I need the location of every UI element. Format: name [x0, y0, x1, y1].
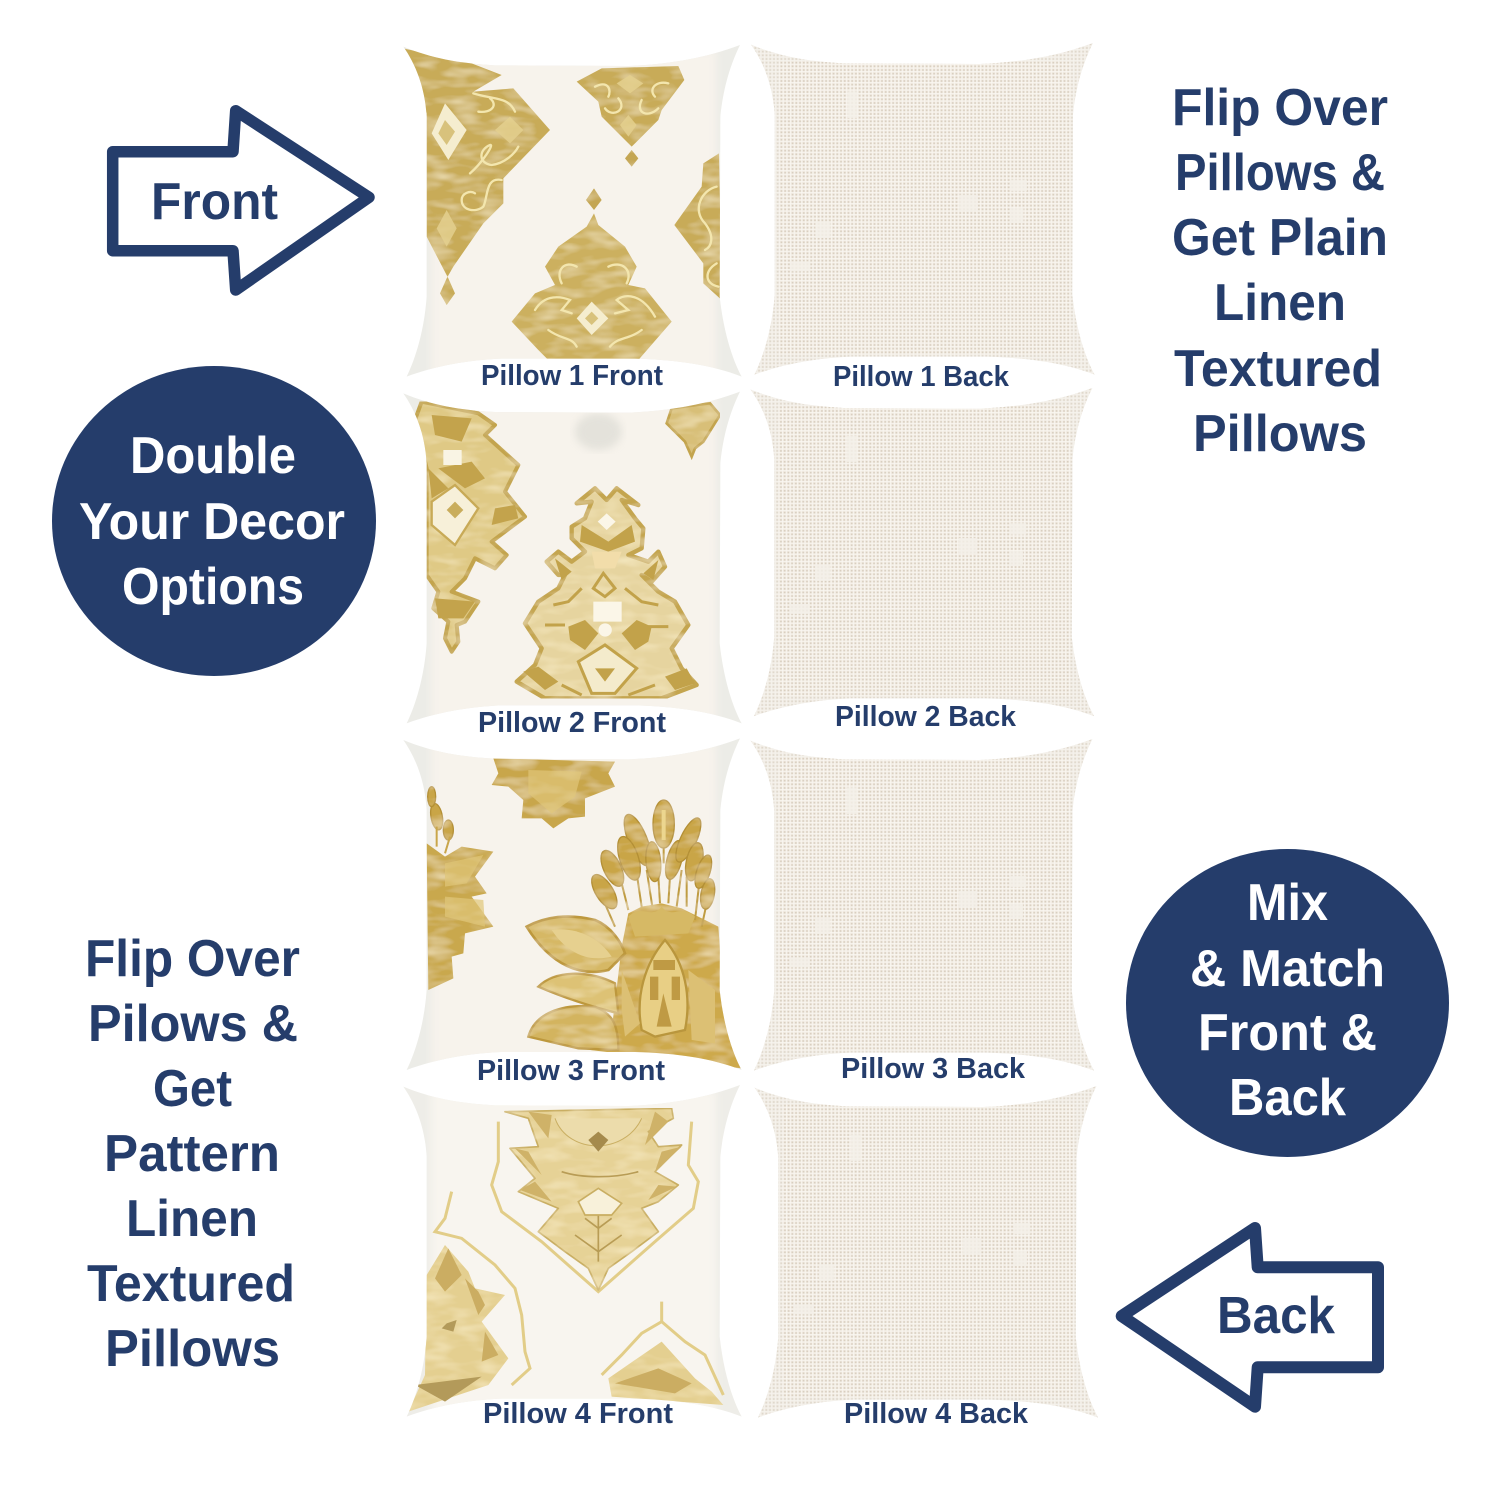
badge: mix and match	[1126, 849, 1449, 1157]
label: pillow 2 back: Pillow 2 Back	[835, 701, 1017, 733]
badge: double your decor options: Your Decor	[79, 493, 345, 551]
badge: double your decor options: Options	[122, 558, 304, 616]
pillow 1 back	[751, 43, 1095, 375]
text block: flip over to pattern linen: Pattern	[104, 1125, 280, 1183]
label: pillow 4 front: Pillow 4 Front	[483, 1398, 673, 1430]
text block: flip over to plain linen: Textured	[1174, 340, 1382, 398]
badge: mix and match: Front &	[1198, 1004, 1377, 1062]
label: pillow 1 front: Pillow 1 Front	[481, 360, 663, 392]
text block: flip over to plain linen: Pillows &	[1175, 144, 1385, 202]
pillow 3 front	[403, 738, 742, 1070]
pillow 1 front	[403, 45, 742, 377]
text block: flip over to plain linen	[1172, 79, 1388, 463]
arrow: front: Front	[151, 173, 278, 231]
text block: flip over to plain linen: Pillows	[1193, 405, 1367, 463]
badge: double your decor options: Double	[130, 427, 296, 485]
text block: flip over to plain linen: Flip Over	[1172, 79, 1388, 137]
arrow: front	[113, 111, 369, 290]
label: pillow 3 back: Pillow 3 Back	[841, 1053, 1026, 1085]
badge: mix and match: & Match	[1190, 940, 1385, 998]
label: pillow 3 front: Pillow 3 Front	[477, 1055, 665, 1087]
pillow 4 back	[754, 1086, 1098, 1418]
text block: flip over to pattern linen: Textured	[87, 1255, 295, 1313]
arrow: back	[1122, 1228, 1378, 1407]
badge: mix and match: Back	[1229, 1069, 1346, 1127]
label: pillow 1 back: Pillow 1 Back	[833, 361, 1010, 393]
badge: mix and match: Mix	[1247, 874, 1328, 932]
label: pillow 2 front: Pillow 2 Front	[478, 707, 666, 739]
text block: flip over to pattern linen	[85, 930, 300, 1378]
arrow: back: Back	[1217, 1287, 1335, 1345]
label: pillow 4 back: Pillow 4 Back	[844, 1398, 1029, 1430]
text block: flip over to pattern linen: Flip Over	[85, 930, 300, 988]
text block: flip over to pattern linen: Get	[153, 1060, 232, 1118]
text block: flip over to plain linen: Get Plain	[1172, 209, 1388, 267]
text block: flip over to pattern linen: Pillows	[105, 1320, 280, 1378]
badge: double your decor options	[52, 366, 376, 676]
pillow 2 front	[403, 392, 742, 723]
text block: flip over to pattern linen: Linen	[126, 1190, 258, 1248]
pillow 4 front	[403, 1085, 742, 1417]
text block: flip over to pattern linen: Pilows &	[88, 995, 298, 1053]
pillow 3 back	[750, 739, 1094, 1071]
text block: flip over to plain linen: Linen	[1214, 274, 1346, 332]
pillow 2 back	[750, 388, 1094, 716]
pillow labels	[477, 360, 1029, 1430]
